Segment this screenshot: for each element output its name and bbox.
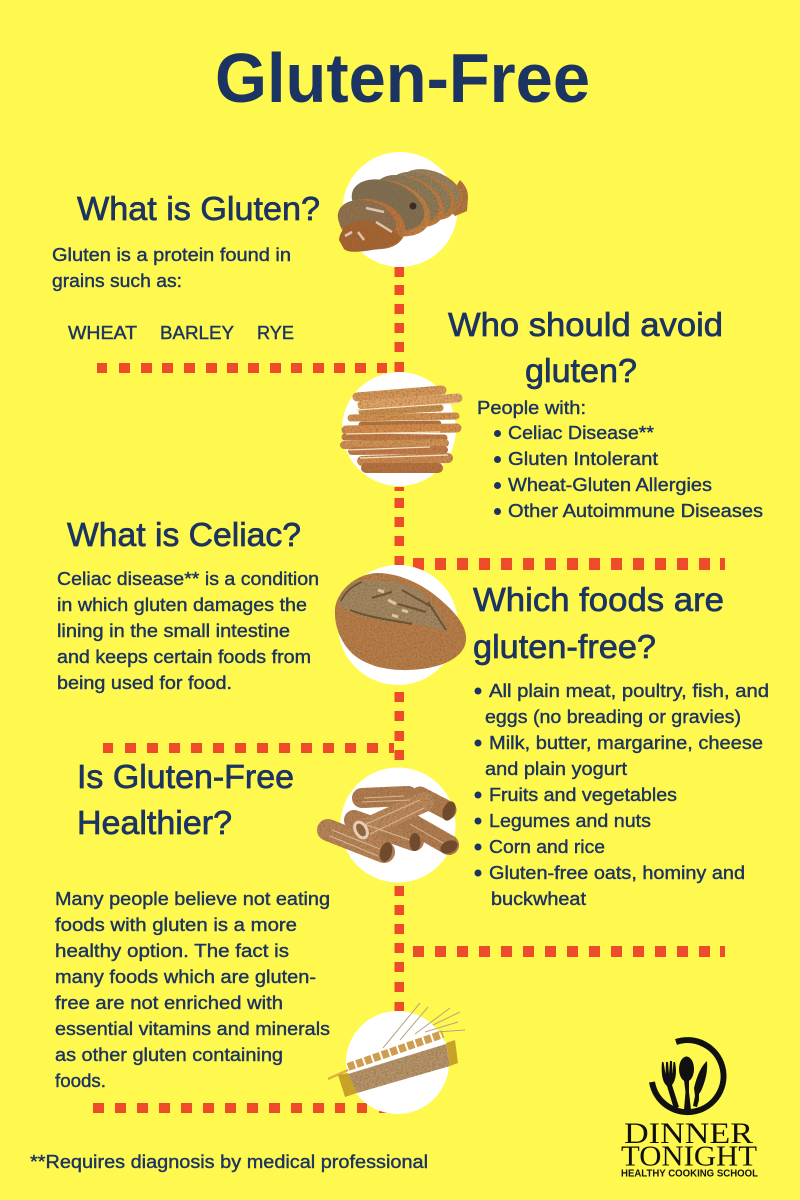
text block: celiac definition — [57, 569, 319, 693]
text block: healthier explanation: essential vitamins and minerals — [55, 1019, 330, 1039]
text block: gluten-free foods list: Corn and rice — [489, 837, 605, 857]
heading: which foods are gluten-free: gluten-free? — [473, 628, 656, 665]
text block: celiac definition: in which gluten damages the — [57, 595, 307, 615]
icon: wheat and grain bar — [328, 1003, 465, 1114]
icon: plate, fork, spoon and knife — [652, 1040, 724, 1112]
dotted line: gluten section — [97, 363, 387, 373]
heading: is gluten-free healthier — [77, 758, 294, 841]
grain list — [68, 323, 294, 343]
text block: celiac definition: lining in the small intestine — [57, 621, 290, 641]
text block: people who should avoid gluten: Celiac Disease** — [508, 423, 654, 443]
text block: gluten definition: Gluten is a protein found in — [52, 245, 291, 265]
heading: what is celiac: What is Celiac? — [67, 516, 301, 553]
icon: whole grain roll — [335, 565, 466, 685]
heading: is gluten-free healthier: Is Gluten-Free — [77, 758, 294, 795]
text block: people who should avoid gluten — [477, 398, 763, 521]
text block: gluten definition — [52, 245, 291, 291]
text block: gluten-free foods list: eggs (no breading or gravies) — [485, 707, 741, 727]
text block: healthier explanation — [55, 889, 330, 1091]
grain list: RYE — [257, 323, 294, 343]
text block: gluten-free foods list: All plain meat, poultry, fish, and — [489, 681, 769, 701]
text block: healthier explanation: foods. — [55, 1071, 106, 1091]
text block: people who should avoid gluten: People with: — [477, 398, 586, 418]
text block: healthier explanation: healthy option. The fact is — [55, 941, 289, 961]
logo: Dinner Tonight: TONIGHT — [621, 1140, 757, 1172]
text block: celiac definition: Celiac disease** is a condition — [57, 569, 319, 589]
text block: celiac definition: and keeps certain foods from — [57, 647, 311, 667]
text block: healthier explanation: many foods which are gluten- — [55, 967, 316, 987]
text block: gluten-free foods list: Legumes and nuts — [489, 811, 651, 831]
text block: people who should avoid gluten: Wheat-Gluten Allergies — [508, 475, 712, 495]
heading: who should avoid gluten: Who should avoid — [448, 306, 723, 343]
text block: healthier explanation: free are not enriched with — [55, 993, 283, 1013]
text block: gluten definition: grains such as: — [52, 271, 182, 291]
grain list: BARLEY — [160, 323, 234, 343]
text block: healthier explanation: Many people believe not eating — [55, 889, 330, 909]
icon: rigatoni pasta — [328, 768, 460, 882]
footnote: **Requires diagnosis by medical professional — [30, 1152, 428, 1172]
icon: stacked white bread — [342, 372, 458, 486]
text block: people who should avoid gluten: Other Autoimmune Diseases — [508, 501, 763, 521]
dotted line: celiac section — [103, 743, 394, 753]
heading: which foods are gluten-free: Which foods are — [473, 581, 724, 618]
grain list: WHEAT — [68, 323, 137, 343]
heading: which foods are gluten-free — [473, 581, 724, 665]
title: Gluten-Free — [215, 39, 590, 117]
text block: celiac definition: being used for food. — [57, 673, 232, 693]
heading: who should avoid gluten — [448, 306, 723, 389]
text block: gluten-free foods list: Gluten-free oats, hominy and — [489, 863, 745, 883]
vertical dotted connector — [394, 267, 404, 1011]
heading: who should avoid gluten: gluten? — [525, 352, 637, 389]
text block: gluten-free foods list: Milk, butter, margarine, cheese — [489, 733, 763, 753]
text block: gluten-free foods list: Fruits and vegetables — [489, 785, 677, 805]
dotted line: who should avoid section — [413, 558, 725, 570]
text block: healthier explanation: as other gluten containing — [55, 1045, 283, 1065]
heading: what is gluten: What is Gluten? — [77, 190, 320, 227]
heading: is gluten-free healthier: Healthier? — [77, 804, 232, 841]
dotted line: foods section — [413, 946, 725, 957]
logo: Dinner Tonight — [621, 1040, 759, 1180]
text block: gluten-free foods list: and plain yogurt — [485, 759, 627, 779]
icon: sliced dark bread — [332, 152, 470, 267]
text block: healthier explanation: foods with gluten is a more — [55, 915, 297, 935]
text block: people who should avoid gluten: Gluten Intolerant — [508, 449, 658, 469]
logo: Dinner Tonight: DINNER — [624, 1117, 753, 1150]
dotted line: healthier section — [93, 1103, 390, 1113]
text block: gluten-free foods list: buckwheat — [491, 889, 586, 909]
logo: Dinner Tonight: HEALTHY COOKING SCHOOL — [621, 1168, 759, 1180]
text block: gluten-free foods list — [474, 681, 769, 909]
